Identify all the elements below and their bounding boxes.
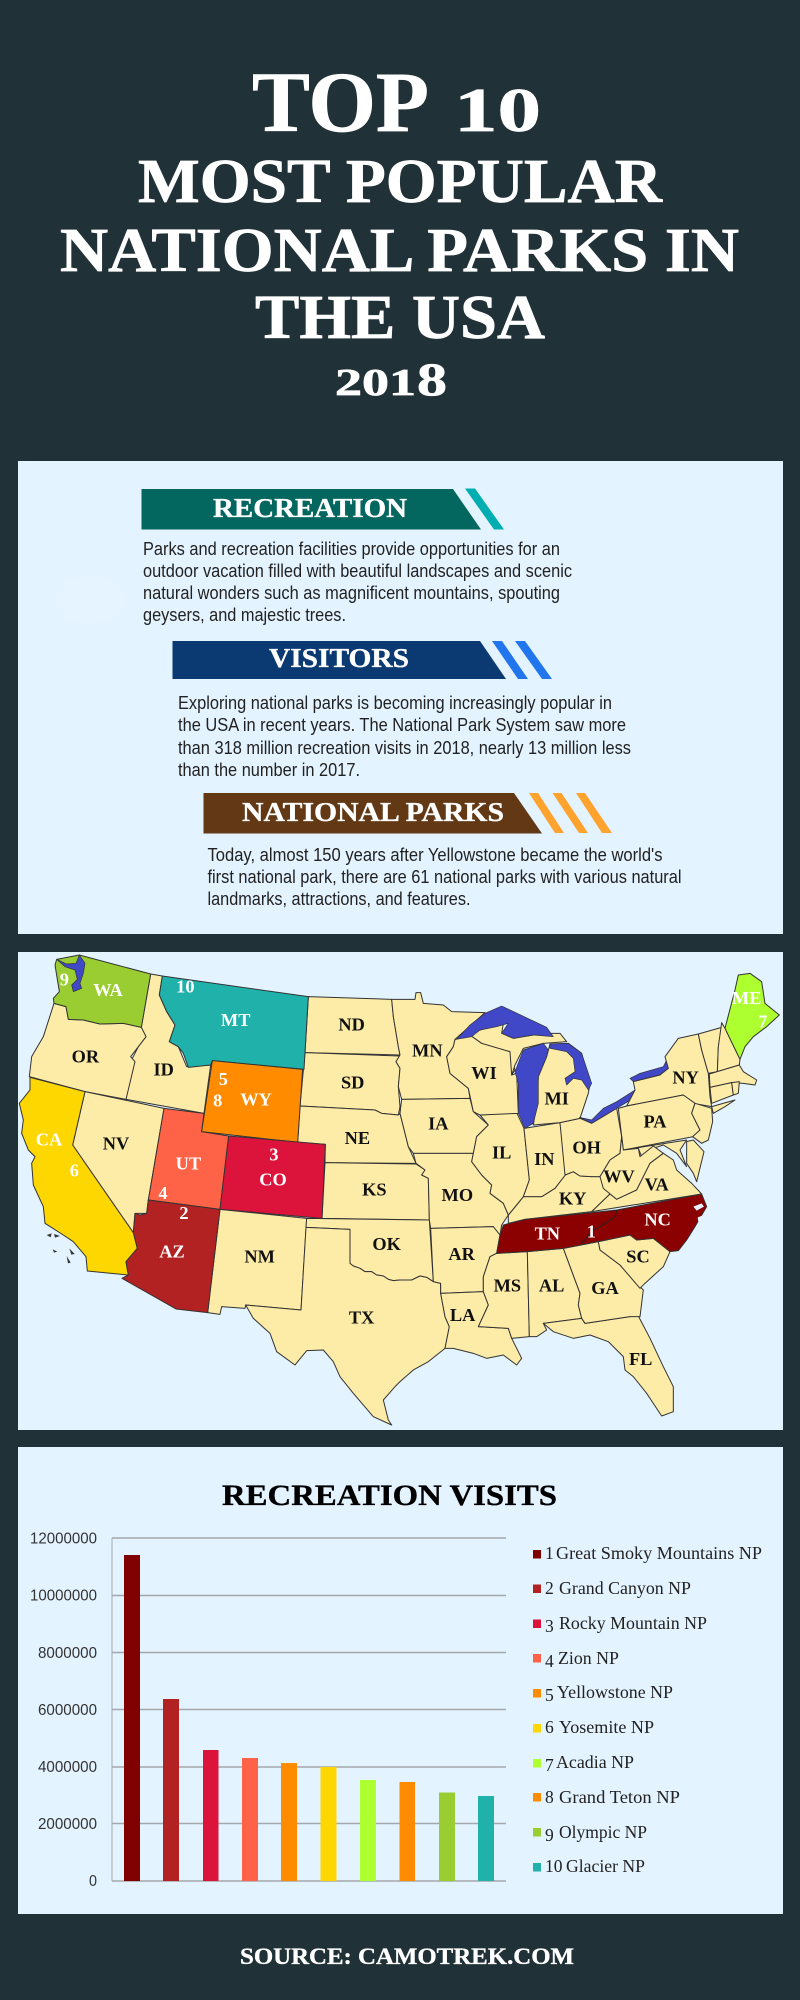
state: New York [627, 1034, 712, 1107]
state: Alabama [527, 1248, 582, 1337]
state: Missouri [413, 1153, 508, 1235]
state: Nevada [73, 1092, 164, 1233]
chart: grid and axis labels: 6000000 [38, 1702, 97, 1719]
state: Maine [725, 973, 779, 1059]
map: state labels and park numbers: SD [341, 1072, 364, 1092]
banner: visitors [172, 641, 552, 679]
chart: legend: 3 [545, 1616, 554, 1636]
panel: recreation visits chart [18, 1447, 783, 1914]
title: 8 [417, 354, 447, 406]
map: state labels and park numbers: OK [372, 1234, 402, 1254]
map: state labels and park numbers: OH [572, 1137, 601, 1157]
map: state labels and park numbers: WV [603, 1166, 636, 1186]
chart: legend: 1 [545, 1543, 554, 1563]
chart: legend: 8 [545, 1787, 554, 1807]
map: state labels and park numbers: TN [535, 1223, 560, 1243]
state: Arkansas [431, 1227, 500, 1293]
banner: recreation [142, 488, 504, 530]
chart: legend: 5 [545, 1685, 554, 1705]
chart: legend: Glacier NP [566, 1856, 645, 1876]
chart: legend: Rocky Mountain NP [559, 1613, 707, 1633]
panel: map of the USA [18, 952, 783, 1430]
map: state labels and park numbers: KY [559, 1188, 586, 1208]
map: state labels and park numbers: WA [93, 980, 124, 1000]
title: 201 [335, 362, 416, 404]
map: state labels and park numbers: NE [345, 1128, 370, 1148]
heading: recreation visits: RECREATION VISITS [222, 1479, 557, 1512]
state: North Dakota [305, 997, 400, 1055]
text: national parks paragraph: Today, almost 150 years after Yellowstone became the world's [208, 844, 662, 865]
map: state labels and park numbers: AZ [159, 1241, 185, 1261]
map: state labels and park numbers: NM [244, 1246, 275, 1266]
icon: channel islands [47, 1233, 75, 1263]
state: Wisconsin [447, 1035, 518, 1115]
banner: national parks: NATIONAL PARKS [242, 797, 504, 827]
map: state labels and park numbers: CA [36, 1130, 63, 1150]
title: 10 [454, 77, 541, 145]
map: state labels and park numbers: IA [428, 1113, 449, 1133]
chart: legend: 9 [545, 1825, 554, 1845]
state: South Dakota [300, 1053, 400, 1115]
state: Mississippi [478, 1252, 529, 1338]
text: visitors paragraph: Exploring national parks is becoming increasingly popular in [178, 692, 612, 713]
chart: legend: 2 [545, 1578, 554, 1598]
chart: legend: 6 [545, 1717, 554, 1737]
state: Florida [543, 1316, 673, 1416]
map: state labels and park numbers: PA [643, 1111, 667, 1131]
map: state labels and park numbers: WY [240, 1090, 272, 1110]
chart: bars [124, 1555, 494, 1881]
state: Washington [53, 955, 151, 1027]
text: national parks paragraph: first national park, there are 61 national parks with various natural [208, 866, 682, 887]
state: Kansas [322, 1163, 429, 1220]
state: Utah [148, 1108, 229, 1209]
state: Georgia [563, 1242, 643, 1323]
chart: legend: Zion NP [558, 1648, 619, 1668]
map: state labels and park numbers: KS [362, 1180, 387, 1200]
state: California [19, 1077, 137, 1275]
map: state labels and park numbers: ME [732, 988, 761, 1008]
map: state labels and park numbers: AR [448, 1244, 476, 1264]
state: Maryland [623, 1140, 687, 1167]
chart: grid and axis labels: 4000000 [38, 1759, 97, 1776]
map: state labels and park numbers: MI [544, 1088, 569, 1108]
state: Pennsylvania [618, 1095, 700, 1150]
text: recreation paragraph: natural wonders such as magnificent mountains, spouting [143, 582, 560, 603]
water: Puget Sound [57, 955, 85, 992]
state: New Mexico [208, 1209, 307, 1314]
chart: legend: Acadia NP [556, 1752, 634, 1772]
text: recreation paragraph: geysers, and majestic trees. [143, 604, 346, 625]
state: Wyoming [202, 1061, 303, 1142]
map: state labels and park numbers: ND [338, 1015, 365, 1035]
state: Indiana [523, 1123, 567, 1197]
map: state labels and park numbers: IN [534, 1149, 555, 1169]
map: states [19, 955, 779, 1425]
map: state labels and park numbers: 9 [60, 970, 69, 990]
state: Vermont [698, 1027, 722, 1073]
map: state labels and park numbers: FL [629, 1349, 652, 1369]
title: TOP [252, 54, 429, 150]
map: state labels and park numbers: 1 [587, 1221, 596, 1241]
title: MOST POPULAR [138, 148, 663, 216]
map: state labels and park numbers: 7 [758, 1011, 767, 1031]
state: Louisiana [441, 1292, 522, 1365]
text: visitors paragraph [178, 692, 631, 780]
chart: grid and axis labels: 8000000 [38, 1645, 97, 1662]
map: state labels and park numbers: 6 [70, 1161, 79, 1181]
map: state labels and park numbers: 3 [269, 1145, 279, 1165]
map: state labels and park numbers: NC [644, 1210, 671, 1230]
banner: national parks [204, 793, 612, 834]
text: national parks paragraph [208, 844, 682, 909]
source line: SOURCE: CAMOTREK.COM [240, 1944, 574, 1969]
state: West Virginia [600, 1137, 663, 1199]
state: Oregon [29, 1003, 146, 1099]
chart: grid and axis labels [30, 1530, 506, 1890]
map: state labels and park numbers: CO [259, 1170, 287, 1190]
state: Tennessee and North Carolina [497, 1194, 707, 1253]
chart: legend: Grand Canyon NP [559, 1578, 691, 1598]
chart: legend: Yosemite NP [559, 1717, 654, 1737]
map: state labels and park numbers: AL [539, 1276, 564, 1296]
text: visitors paragraph: than the number in 2017. [178, 759, 360, 780]
title: THE USA [255, 284, 545, 352]
state: Virginia [592, 1153, 702, 1212]
state: South Carolina [598, 1235, 670, 1288]
chart: legend: Yellowstone NP [557, 1682, 673, 1702]
map: state labels and park numbers: OR [72, 1046, 100, 1066]
chart: grid and axis labels: 12000000 [30, 1530, 97, 1548]
map: state labels and park numbers: 4 [158, 1183, 168, 1203]
state: Arizona [122, 1200, 220, 1313]
chart: legend: 7 [545, 1755, 554, 1775]
map: state labels and park numbers: MO [442, 1185, 473, 1205]
map: state labels and park numbers: MN [412, 1041, 443, 1061]
chart: grid and axis labels: 10000000 [30, 1588, 97, 1604]
state: Minnesota [392, 993, 485, 1099]
state: Oklahoma [306, 1218, 433, 1282]
state: New Jersey [692, 1103, 713, 1143]
text: recreation paragraph: Parks and recreation facilities provide opportunities for an [143, 538, 560, 559]
map: state labels and park numbers: NY [672, 1067, 699, 1087]
state: Texas [246, 1227, 449, 1425]
chart: legend: Great Smoky Mountains NP [556, 1543, 762, 1563]
text: visitors paragraph: than 318 million recreation visits in 2018, nearly 13 million less [178, 737, 631, 758]
state: Rhode Island [732, 1082, 739, 1095]
state: Kentucky [508, 1172, 610, 1223]
map: state labels and park numbers: UT [176, 1153, 201, 1173]
map: state labels and park numbers: WI [471, 1063, 497, 1083]
text: recreation paragraph: outdoor vacation filled with beautiful landscapes and scenic [143, 560, 572, 581]
state: Delaware and Delmarva [687, 1140, 704, 1182]
title [60, 54, 739, 406]
banner: visitors: VISITORS [269, 643, 409, 673]
state: Michigan [455, 1023, 590, 1125]
lakes: Great Lakes [457, 1006, 668, 1128]
map: eastern states [392, 973, 779, 1416]
banner: recreation: RECREATION [213, 493, 408, 523]
state: Massachusetts [709, 1065, 757, 1087]
map: state labels and park numbers: LA [450, 1305, 476, 1325]
title: NATIONAL PARKS IN [60, 217, 739, 285]
state: Connecticut [710, 1083, 733, 1103]
map: state labels and park numbers: 5 [219, 1069, 228, 1089]
map: state labels and park numbers: 8 [213, 1091, 222, 1111]
text: visitors paragraph: the USA in recent years. The National Park System saw more [178, 714, 626, 735]
map: state labels and park numbers: IL [492, 1142, 511, 1162]
state: Idaho [126, 974, 211, 1113]
state: Long Island [712, 1100, 735, 1113]
chart: legend [533, 1543, 762, 1876]
map: state labels and park numbers: GA [591, 1278, 620, 1298]
chart: legend: Grand Teton NP [559, 1787, 680, 1807]
chart: legend: 10 [545, 1856, 563, 1876]
map: state labels and park numbers: NV [103, 1133, 130, 1153]
map: state labels and park numbers: SC [626, 1247, 650, 1267]
state: Ohio [560, 1108, 622, 1177]
state: New Hampshire [717, 1023, 740, 1072]
state: Nebraska [298, 1106, 416, 1163]
state: Illinois [472, 1113, 529, 1215]
chart: legend: Olympic NP [559, 1822, 647, 1842]
map: state labels and park numbers: 2 [179, 1203, 189, 1223]
map: state labels and park numbers: MS [494, 1276, 521, 1296]
panel: introduction [18, 461, 783, 934]
map: state labels and park numbers: TX [349, 1307, 375, 1327]
map: state labels and park numbers: VA [645, 1175, 669, 1195]
state: Colorado [220, 1136, 325, 1218]
state: Montana [159, 976, 308, 1069]
map: state labels and park numbers: MT [221, 1010, 250, 1030]
chart: grid and axis labels: 0 [89, 1873, 97, 1890]
state: Iowa [400, 1098, 488, 1153]
chart: legend: 4 [545, 1651, 554, 1671]
text: recreation paragraph [143, 538, 572, 625]
text: national parks paragraph: landmarks, attractions, and features. [208, 888, 470, 909]
map: state labels and park numbers: 10 [176, 976, 194, 996]
map: state labels and park numbers [36, 970, 767, 1369]
chart: grid and axis labels: 2000000 [38, 1816, 97, 1833]
map: state labels and park numbers: ID [153, 1060, 174, 1080]
